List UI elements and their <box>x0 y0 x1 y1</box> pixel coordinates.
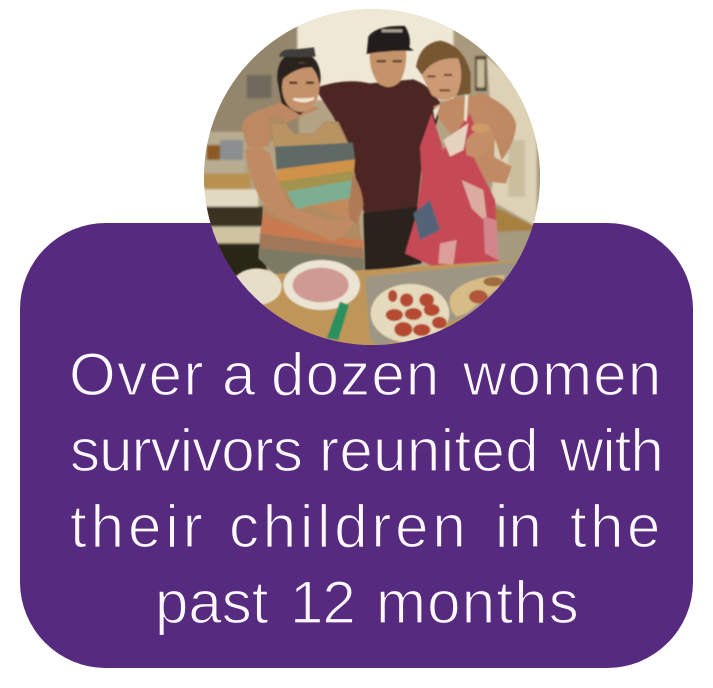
left woman: head and hair <box>277 52 321 115</box>
right woman: hand with food <box>464 131 481 158</box>
line 1: a <box>222 341 256 408</box>
panel: purple rounded card <box>20 223 693 668</box>
table and food <box>200 260 545 350</box>
line 1: dozen <box>271 341 440 408</box>
son: arms around shoulders <box>242 99 320 148</box>
line 3: children <box>229 493 470 560</box>
line 3: in <box>495 493 542 560</box>
kitchen wall <box>210 26 300 140</box>
left woman: dress <box>258 116 362 250</box>
line 1: women <box>462 341 662 408</box>
counter left <box>204 130 245 174</box>
line 4: past <box>155 569 269 636</box>
text block: headline <box>69 341 664 636</box>
line 4: months <box>376 569 580 636</box>
line 2: survivors <box>70 417 302 484</box>
son: shirt and shorts <box>315 79 442 220</box>
line 3: the <box>570 493 664 560</box>
son: head and cap <box>370 48 406 87</box>
line 2: with <box>559 417 663 484</box>
line 2: reunited <box>319 417 539 484</box>
line 1: Over <box>69 341 205 408</box>
floor <box>495 207 533 232</box>
right woman: pink dress <box>405 113 498 267</box>
door <box>487 57 537 227</box>
right woman: hair, head <box>416 41 471 97</box>
line 3: their <box>70 493 207 560</box>
photo: family of three in a circle <box>200 0 547 350</box>
line 4: 12 <box>290 569 355 636</box>
left woman: arms <box>245 147 357 242</box>
right woman: chest and arm <box>433 95 512 183</box>
